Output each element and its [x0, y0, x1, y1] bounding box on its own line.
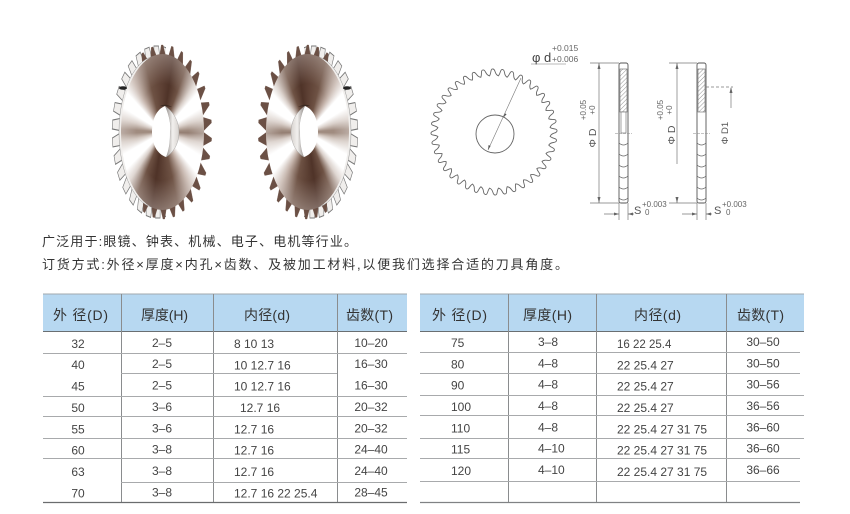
gear teeth — [258, 44, 358, 220]
technical drawing: side section view 1 — [579, 63, 667, 220]
table header: 厚度(H) — [141, 307, 188, 323]
column: bore — [617, 339, 707, 479]
height dimension — [656, 63, 697, 203]
height dimension: Φ D — [666, 125, 678, 144]
table header: 外 径(D) — [53, 307, 108, 323]
column: teeth: 16–30 — [354, 379, 388, 393]
height dimension: +0 — [665, 105, 674, 115]
column: bore: 16 22 25.4 — [617, 339, 672, 351]
blade section — [615, 63, 632, 203]
column: bore: 12.7 16 — [234, 465, 274, 479]
column: teeth — [746, 335, 780, 477]
column: bore: 22 25.4 27 31 75 — [617, 422, 707, 436]
column: teeth: 24–40 — [354, 464, 388, 478]
column: thickness: 4–8 — [538, 420, 558, 434]
column: bore: 22 25.4 27 — [617, 401, 674, 415]
inner diameter dimension — [706, 87, 733, 144]
table: right specifications — [420, 294, 804, 502]
column: thickness: 3–6 — [152, 421, 172, 435]
photo: saw blade left — [112, 44, 212, 220]
column: outer diameter — [71, 337, 85, 500]
column: thickness: 3–8 — [152, 485, 172, 499]
centre hole — [290, 104, 318, 158]
table grid — [420, 294, 804, 502]
column: thickness: 3–6 — [152, 400, 172, 414]
column: teeth: 28–45 — [354, 485, 388, 499]
column: thickness: 4–10 — [538, 463, 565, 477]
bore tolerance label — [531, 43, 579, 65]
column: outer diameter: 40 — [71, 358, 85, 372]
height dimension: Φ D — [587, 128, 599, 147]
column: thickness: 3–8 — [152, 464, 172, 478]
column: thickness — [152, 336, 172, 499]
column: outer diameter: 120 — [451, 464, 471, 478]
column: thickness: 4–10 — [538, 442, 565, 456]
column: outer diameter — [451, 336, 471, 478]
thickness dimension: +0.003 — [722, 200, 747, 209]
table header: 齿数(T) — [737, 307, 784, 323]
thickness dimension: +0.003 — [642, 200, 667, 209]
blade body — [121, 54, 204, 210]
column: bore: 22 25.4 27 — [617, 380, 674, 394]
column: teeth: 30–50 — [746, 335, 780, 349]
column: bore: 22 25.4 27 — [617, 358, 674, 372]
column: teeth: 36–60 — [746, 420, 780, 434]
column: outer diameter: 70 — [71, 486, 85, 500]
column: teeth: 30–56 — [746, 378, 780, 392]
column: thickness: 3–8 — [538, 335, 558, 349]
height dimension: +0.05 — [656, 99, 665, 120]
column: thickness: 2–5 — [152, 336, 172, 350]
table: left specifications — [43, 294, 407, 502]
column: teeth: 36–60 — [746, 442, 780, 456]
blade body — [266, 54, 349, 210]
column: outer diameter: 60 — [71, 444, 85, 458]
column: outer diameter: 100 — [451, 400, 471, 414]
column: thickness: 2–5 — [152, 357, 172, 371]
thickness dimension: S — [714, 205, 721, 217]
bore tolerance label: φ d — [532, 50, 551, 65]
thickness dimension — [682, 200, 747, 220]
diameter line — [488, 78, 521, 150]
text: applications: 广泛用于:眼镜、钟表、机械、电子、电机等行业。 — [42, 234, 357, 249]
column: bore: 22 25.4 27 31 75 — [617, 465, 707, 479]
column: thickness: 4–8 — [538, 399, 558, 413]
column: teeth — [354, 336, 388, 499]
table grid — [43, 294, 407, 502]
technical drawing: side section view 2 — [656, 63, 747, 220]
column: teeth: 20–32 — [354, 421, 388, 435]
column: thickness: 4–8 — [538, 356, 558, 370]
column: outer diameter: 63 — [71, 465, 85, 479]
column: bore: 22 25.4 27 31 75 — [617, 444, 707, 458]
thickness dimension: 0 — [726, 208, 731, 217]
table header — [420, 294, 804, 332]
column: bore: 8 10 13 — [234, 337, 274, 351]
bore circle — [476, 115, 514, 153]
column: outer diameter: 90 — [451, 379, 465, 393]
column: outer diameter: 32 — [71, 337, 85, 351]
column: bore: 12.7 16 — [234, 444, 274, 458]
column: teeth: 36–66 — [746, 463, 780, 477]
column: bore: 10 12.7 16 — [234, 358, 291, 372]
column: bore: 12.7 16 22 25.4 — [234, 486, 318, 500]
thickness dimension: 0 — [645, 208, 650, 217]
blade section — [693, 63, 710, 203]
column: teeth: 24–40 — [354, 443, 388, 457]
column: bore: 12.7 16 — [234, 422, 274, 436]
height dimension: +0 — [588, 105, 597, 115]
height dimension: +0.05 — [579, 99, 588, 120]
toothed outline — [421, 59, 567, 205]
column: thickness — [538, 335, 565, 477]
table header: 外 径(D) — [432, 307, 487, 323]
text: ordering information: 订货方式:外径×厚度×内孔×齿数、及被加工材料,以便我们选择合适的刀具角度。 — [42, 257, 568, 272]
column: teeth: 10–20 — [354, 336, 388, 350]
column: thickness: 3–8 — [152, 443, 172, 457]
column: outer diameter: 50 — [71, 401, 85, 415]
column: bore: 10 12.7 16 — [234, 380, 291, 394]
gear teeth — [112, 44, 212, 220]
column: outer diameter: 115 — [451, 443, 470, 457]
column: teeth: 20–32 — [354, 400, 388, 414]
column: outer diameter: 55 — [71, 422, 85, 436]
column: bore: 12.7 16 — [240, 401, 280, 415]
bore tolerance label: +0.006 — [552, 54, 579, 64]
technical drawing: blade front view — [421, 43, 579, 205]
bore tolerance label: +0.015 — [552, 43, 579, 53]
centre hole — [152, 104, 180, 158]
column: thickness: 2–5 — [152, 379, 172, 393]
column: outer diameter: 75 — [451, 336, 465, 350]
table header — [43, 294, 407, 332]
table header: 内径(d) — [634, 307, 681, 323]
photo: saw blade right — [258, 44, 358, 220]
table header: 齿数(T) — [346, 307, 393, 323]
column: teeth: 16–30 — [354, 357, 388, 371]
table header: 厚度(H) — [523, 307, 572, 323]
column: outer diameter: 110 — [451, 421, 470, 435]
thickness dimension: S — [634, 205, 641, 217]
height dimension — [579, 63, 619, 203]
column: teeth: 30–50 — [746, 356, 780, 370]
column: bore — [234, 337, 318, 500]
table header: 内径(d) — [244, 307, 290, 323]
inner diameter dimension: Φ D1 — [720, 122, 731, 144]
column: outer diameter: 80 — [451, 357, 465, 371]
thickness dimension — [604, 200, 667, 220]
column: thickness: 4–8 — [538, 378, 558, 392]
column: outer diameter: 45 — [71, 380, 85, 394]
column: teeth: 36–56 — [746, 399, 780, 413]
